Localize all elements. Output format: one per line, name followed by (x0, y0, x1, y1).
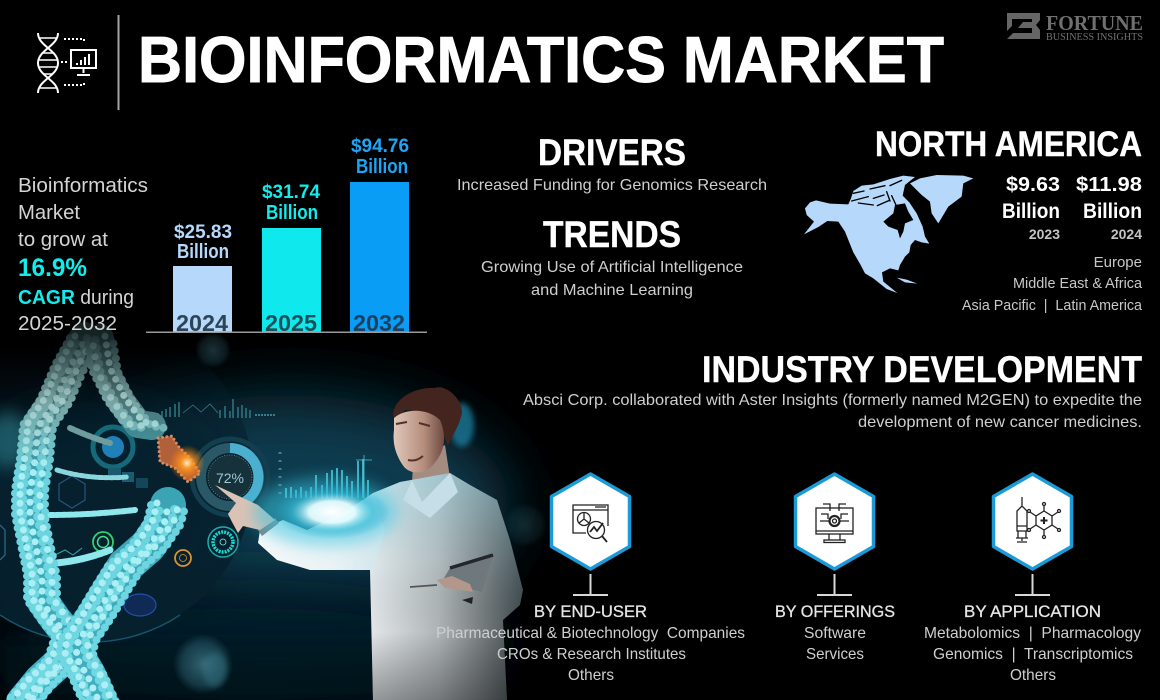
strand left (7, 335, 100, 700)
category: application: Genomics | Transcriptomics (933, 646, 1133, 663)
coat shading (370, 473, 523, 700)
category: application: Others (1010, 667, 1056, 684)
globe backdrop (0, 316, 253, 642)
bar 2025 (262, 182, 321, 336)
panel: drivers (457, 132, 767, 194)
coat body (370, 473, 523, 700)
cuff (258, 518, 279, 536)
value 2024 (1076, 174, 1142, 242)
value 2023: $9.63 (1006, 174, 1060, 196)
bar 2025: 2025 (265, 310, 317, 336)
value 2024: 2024 (1111, 226, 1142, 242)
category: application: BY APPLICATION (964, 602, 1101, 621)
illustration: DNA and scientist (0, 316, 547, 700)
text block: CAGR statement: Bioinformatics (18, 175, 148, 197)
chart: small top histogram (158, 399, 275, 418)
gauge: 72 percent (192, 439, 268, 515)
arm (258, 493, 385, 570)
bar 2025: $31.74 (262, 182, 320, 203)
bar 2025: Billion (266, 202, 318, 224)
value 2024: Billion (1083, 200, 1142, 223)
category: application (924, 474, 1141, 684)
text block: CAGR statement (18, 175, 148, 335)
other regions (962, 254, 1143, 314)
bar 2024 (173, 222, 232, 336)
other regions: Middle East & Africa (1013, 275, 1143, 292)
value 2023: Billion (1002, 200, 1060, 223)
panel: industry development: Absci Corp. collaborated with Aster Insights (formerly named M2GEN) to expedite the (523, 392, 1142, 409)
back light on hair (450, 403, 474, 447)
bar 2032: $94.76 (351, 136, 409, 157)
panel: drivers: Increased Funding for Genomics Research (457, 177, 767, 194)
collar (403, 473, 458, 518)
header divider (118, 15, 120, 110)
text block: CAGR statement: Market (18, 202, 80, 224)
cyan hand glow (253, 478, 397, 546)
category: offerings: Services (806, 646, 864, 663)
value 2024: $11.98 (1076, 174, 1142, 196)
strand right lower (59, 502, 185, 700)
bar 2032 (350, 136, 409, 336)
panel: trends: Growing Use of Artificial Intelligence (481, 259, 743, 276)
chart: glowing histogram (280, 452, 372, 498)
HUD widgets (0, 427, 238, 566)
facial features (396, 422, 430, 460)
category: end-user: Others (568, 667, 614, 684)
neck (412, 445, 450, 495)
panel: North America (804, 125, 1143, 314)
face (394, 411, 444, 472)
sleeve mark (462, 597, 473, 604)
panel: trends: and Machine Learning (531, 282, 693, 299)
text block: CAGR statement: to grow at (18, 229, 108, 251)
strand right upper (87, 336, 165, 428)
map: North America (804, 175, 973, 293)
icon: syringe and virus in hexagon (994, 474, 1072, 595)
other regions: Asia Pacific | Latin America (962, 297, 1143, 314)
category: end-user: CROs & Research Institutes (497, 646, 686, 663)
tablet (444, 555, 493, 592)
category: offerings (775, 474, 895, 663)
logo: Fortune Business Insights (1007, 11, 1143, 43)
category: end-user (436, 474, 745, 684)
bar 2032: Billion (356, 156, 408, 178)
logo: Fortune Business Insights: FORTUNE (1046, 11, 1143, 35)
rungs (50, 428, 135, 563)
gauge: 72 percent: 72% (216, 470, 244, 486)
soft teal background (0, 395, 510, 700)
category: end-user: Pharmaceutical & Biotechnology Companies (436, 625, 745, 642)
bar 2024: Billion (177, 241, 229, 263)
bar chart: market size (146, 136, 427, 336)
pen (410, 585, 437, 587)
hair and bun (393, 387, 462, 446)
text block: CAGR statement: 2025-2032 (18, 313, 117, 335)
bar 2024: $25.83 (174, 222, 232, 243)
holding hand (437, 576, 473, 592)
other regions: Europe (1094, 254, 1142, 271)
category: application: Metabolomics | Pharmacology (924, 625, 1141, 642)
category: offerings: Software (804, 625, 866, 642)
category: end-user: BY END-USER (534, 602, 647, 621)
DNA helix (7, 335, 185, 700)
panel: drivers: DRIVERS (538, 132, 686, 173)
panel: industry development: development of new cancer medicines. (858, 414, 1142, 431)
hand (215, 485, 275, 533)
panel: trends (481, 214, 743, 299)
value 2023 (1002, 174, 1060, 242)
title: BIOINFORMATICS MARKET (138, 23, 944, 96)
category: offerings: BY OFFERINGS (775, 602, 895, 621)
icon: monitor with gear in hexagon (796, 474, 874, 595)
icon: DNA with monitor (38, 33, 96, 93)
bar 2032: 2032 (353, 310, 405, 336)
orange spark on molecule (158, 436, 205, 482)
panel: industry development (523, 349, 1142, 431)
value 2023: 2023 (1029, 226, 1060, 242)
bar 2024: 2024 (176, 310, 228, 336)
bokeh lights (0, 332, 547, 694)
text block: CAGR statement: CAGR during (18, 287, 134, 309)
text block: CAGR statement: 16.9% (18, 254, 87, 282)
scientist (215, 387, 523, 700)
panel: trends: TRENDS (543, 214, 681, 255)
icon: analytics window in hexagon (552, 474, 630, 595)
logo: Fortune Business Insights: BUSINESS INSIGHTS (1046, 32, 1143, 43)
